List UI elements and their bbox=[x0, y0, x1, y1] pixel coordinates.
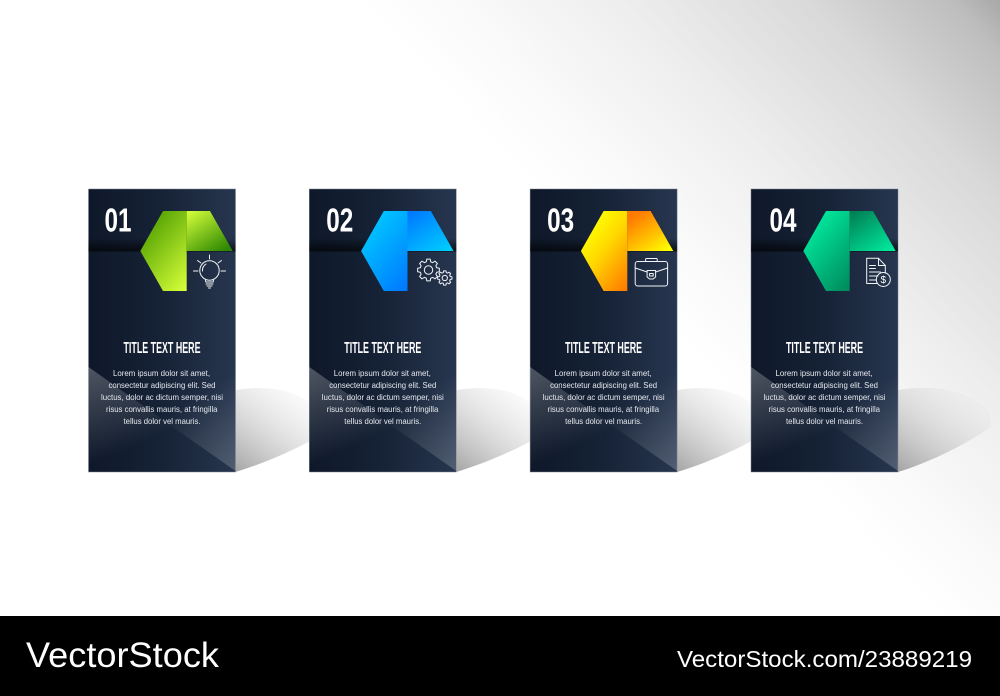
body text 02: risus convallis mauris, at fringilla bbox=[327, 404, 438, 414]
cast shadow 01 bbox=[236, 388, 312, 472]
body text 03: risus convallis mauris, at fringilla bbox=[548, 404, 659, 414]
body text 01: consectetur adipiscing elit. Sed bbox=[108, 380, 216, 390]
panel: step 03 bbox=[530, 189, 754, 472]
cast shadow 03 bbox=[677, 388, 754, 472]
hexagon arrow 01 bbox=[140, 211, 233, 291]
title 01: TITLE TEXT HERE bbox=[124, 340, 200, 357]
body text 02: consectetur adipiscing elit. Sed bbox=[329, 380, 436, 390]
watermark logo: VectorStock bbox=[26, 636, 220, 675]
title 03: TITLE TEXT HERE bbox=[565, 340, 642, 357]
number 04: 04 bbox=[770, 202, 797, 238]
icon: gears bbox=[418, 259, 452, 285]
body text 02: luctus, dolor ac dictum semper, nisi bbox=[322, 392, 444, 402]
body text 04 bbox=[764, 368, 886, 426]
cast shadow 04 bbox=[898, 388, 990, 472]
card 01 bbox=[88, 189, 236, 472]
number 03: 03 bbox=[547, 202, 574, 238]
body text 04: consectetur adipiscing elit. Sed bbox=[771, 380, 878, 390]
card 04 bbox=[751, 189, 898, 472]
body text 01: risus convallis mauris, at fringilla bbox=[106, 404, 218, 414]
number 02: 02 bbox=[326, 202, 353, 238]
card 02 bbox=[309, 189, 456, 472]
panel: step 02 bbox=[309, 189, 533, 472]
body text 02: Lorem ipsum dolor sit amet, bbox=[334, 368, 431, 378]
card 03 bbox=[530, 189, 677, 472]
body text 01: luctus, dolor ac dictum semper, nisi bbox=[101, 392, 223, 402]
watermark bar bbox=[0, 616, 1000, 696]
icon: invoice document with dollar coin bbox=[867, 258, 890, 286]
watermark id: VectorStock.com/23889219 bbox=[677, 646, 972, 672]
body text 04: tellus dolor vel mauris. bbox=[786, 416, 863, 426]
body text 03: luctus, dolor ac dictum semper, nisi bbox=[543, 392, 665, 402]
panel: step 04 bbox=[751, 189, 990, 472]
hexagon arrow 03 bbox=[581, 211, 673, 291]
icon: briefcase bbox=[635, 258, 668, 286]
body text 04: luctus, dolor ac dictum semper, nisi bbox=[764, 392, 886, 402]
body text 03: Lorem ipsum dolor sit amet, bbox=[555, 368, 652, 378]
icon: invoice document with dollar coin: $ bbox=[881, 275, 887, 286]
body text 02 bbox=[322, 368, 444, 426]
hexagon arrow 02 bbox=[361, 211, 454, 291]
hexagon arrow 04 bbox=[803, 211, 896, 291]
title 04: TITLE TEXT HERE bbox=[786, 340, 863, 357]
body text 01: tellus dolor vel mauris. bbox=[124, 416, 200, 426]
body text 04: risus convallis mauris, at fringilla bbox=[768, 404, 880, 414]
title 02: TITLE TEXT HERE bbox=[344, 340, 421, 357]
body text 01: Lorem ipsum dolor sit amet, bbox=[113, 368, 210, 378]
cast shadow 02 bbox=[456, 388, 533, 472]
body text 04: Lorem ipsum dolor sit amet, bbox=[776, 368, 872, 378]
body text 03 bbox=[543, 368, 665, 426]
body text 03: consectetur adipiscing elit. Sed bbox=[550, 380, 657, 390]
number 01: 01 bbox=[104, 202, 132, 238]
icon: light bulb bbox=[194, 255, 226, 288]
body text 03: tellus dolor vel mauris. bbox=[565, 416, 642, 426]
body text 01 bbox=[101, 368, 223, 426]
body text 02: tellus dolor vel mauris. bbox=[344, 416, 421, 426]
panel: step 01 bbox=[88, 189, 312, 472]
